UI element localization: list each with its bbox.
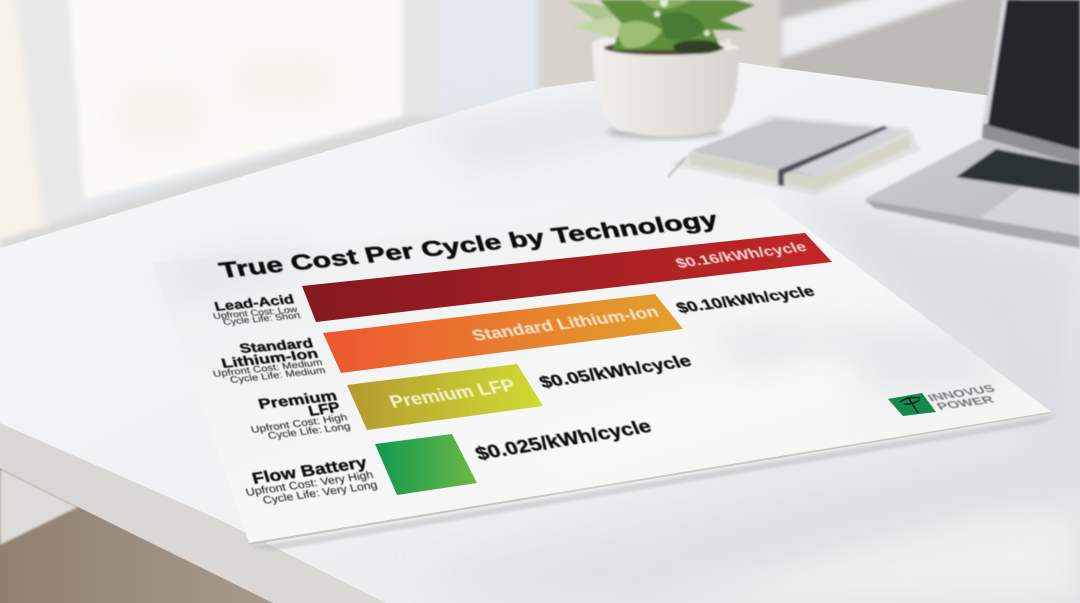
label: Standard Lithium-Ion: Standard bbox=[237, 335, 315, 356]
bar label: Standard Lithium-Ion: Standard Lithium-Ion bbox=[469, 304, 662, 345]
label: Standard Lithium-Ion: Lithium-Ion bbox=[219, 346, 320, 371]
paper light streaks bbox=[165, 245, 1000, 480]
value: Lead-Acid cost: $0.16/kWh/cycle bbox=[672, 238, 810, 271]
floor and desk front edge bbox=[0, 423, 410, 603]
bar label: Premium LFP: Premium LFP bbox=[386, 375, 519, 412]
value: Premium LFP cost: $0.05/kWh/cycle bbox=[536, 351, 695, 392]
label: Standard Lithium-Ion bbox=[212, 335, 327, 385]
bar: Standard Lithium-Ion bbox=[323, 294, 683, 373]
label: Lead-Acid: Upfront Cost: Low bbox=[212, 304, 299, 321]
label: Premium LFP: Cycle Life: Long bbox=[267, 421, 352, 442]
label: Standard Lithium-Ion: Upfront Cost: Medium bbox=[212, 357, 324, 379]
bar: Lead-Acid bbox=[302, 233, 832, 322]
label: Lead-Acid: Cycle Life: Short bbox=[222, 310, 302, 327]
value: Flow Battery cost: $0.025/kWh/cycle bbox=[472, 415, 655, 464]
desk light and shadow streaks bbox=[420, 90, 1080, 603]
label: Flow Battery: Cycle Life: Very Long bbox=[261, 479, 379, 507]
label: Flow Battery: Flow Battery bbox=[250, 454, 369, 488]
label: Premium LFP: LFP bbox=[306, 400, 343, 420]
panel: printed chart sheet bbox=[152, 197, 1053, 545]
label: Standard Lithium-Ion: Cycle Life: Medium bbox=[229, 365, 327, 385]
logo wordmark: INNOVUS bbox=[925, 383, 998, 404]
laptop bbox=[866, 0, 1080, 248]
notebook bbox=[668, 115, 920, 195]
label: Lead-Acid: Lead-Acid bbox=[212, 291, 296, 314]
plant pot with leaves bbox=[568, 0, 755, 139]
label: Lead-Acid bbox=[212, 291, 302, 327]
paper shadow bbox=[252, 415, 1058, 551]
label: Premium LFP bbox=[250, 388, 352, 442]
logo wordmark bbox=[925, 383, 998, 413]
logo: Innovus Power bbox=[888, 383, 998, 416]
logo wordmark: POWER bbox=[934, 394, 997, 413]
bar: Premium LFP bbox=[347, 364, 543, 430]
value: Standard Lithium-Ion cost: $0.10/kWh/cycle bbox=[673, 283, 818, 317]
icon: green square with pylon bbox=[888, 393, 936, 416]
label: Premium LFP: Premium bbox=[256, 388, 339, 413]
title: True Cost Per Cycle by Technology bbox=[216, 207, 721, 283]
bar: Flow Battery bbox=[375, 434, 477, 495]
label: Flow Battery bbox=[244, 454, 379, 507]
label: Flow Battery: Upfront Cost: Very High bbox=[244, 469, 375, 499]
label: Premium LFP: Upfront Cost: High bbox=[250, 412, 349, 436]
